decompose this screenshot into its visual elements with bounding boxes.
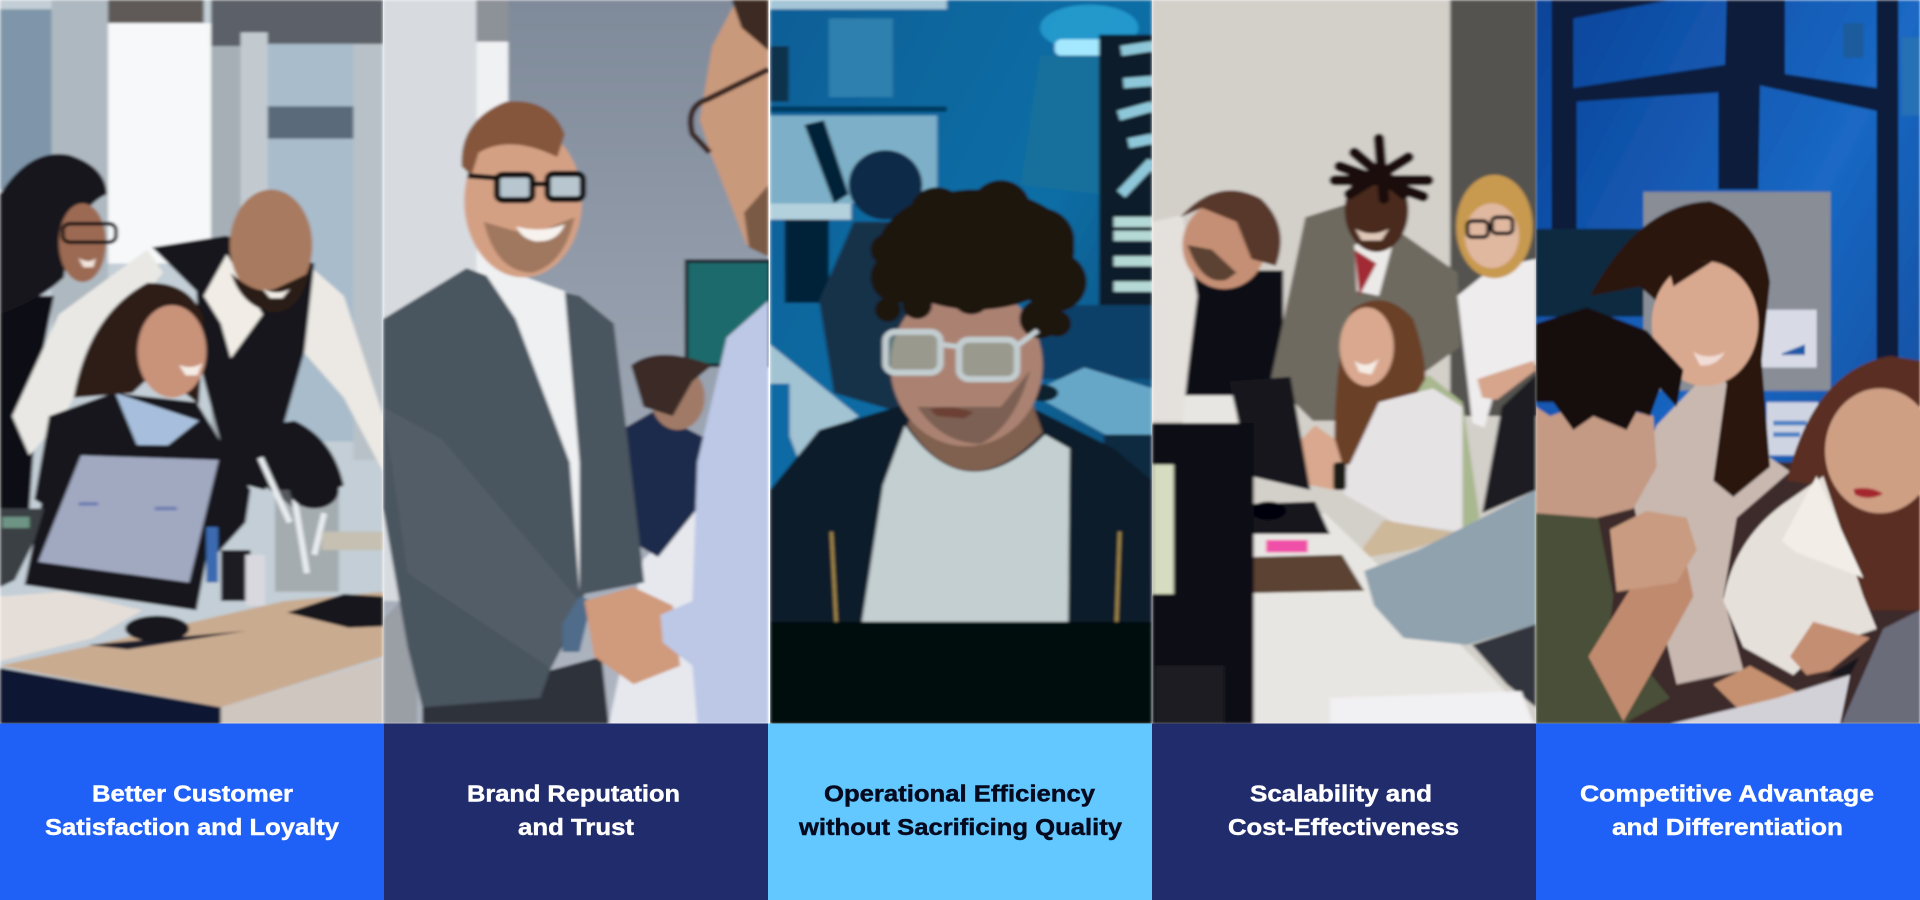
woman standing left bbox=[0, 154, 116, 509]
partner in blue shirt bbox=[661, 0, 769, 724]
caption text: Brand Reputation bbox=[467, 780, 680, 806]
colleague sleeve bbox=[1364, 490, 1536, 645]
caption text: Better Customer bbox=[92, 780, 293, 806]
background colleague bbox=[621, 355, 712, 557]
caption panel: better customer satisfaction bbox=[0, 724, 384, 900]
caption text: and Differentiation bbox=[1612, 814, 1843, 840]
woman seated right bbox=[1723, 356, 1920, 675]
man in front bbox=[1536, 307, 1697, 724]
desk bbox=[1251, 513, 1504, 724]
caption panel: brand reputation bbox=[384, 724, 768, 900]
woman seated bbox=[34, 283, 250, 555]
caption text: Cost-Effectiveness bbox=[1228, 814, 1459, 840]
man in grey blazer bbox=[383, 101, 680, 724]
desk bbox=[0, 592, 383, 707]
photo: three colleagues at a desk with laptop bbox=[0, 0, 383, 724]
caption text bbox=[467, 780, 680, 840]
woman seated with tablet bbox=[1283, 300, 1480, 559]
caption panel: scalability bbox=[1152, 724, 1536, 900]
laptop bbox=[1842, 610, 1920, 724]
caption text: without Sacrificing Quality bbox=[798, 814, 1122, 840]
caption panel: competitive advantage bbox=[1536, 724, 1920, 900]
programmer bbox=[770, 180, 1152, 636]
shadowed area behind the group bbox=[1596, 460, 1920, 724]
tablet bbox=[1229, 377, 1310, 490]
photo: three young colleagues at laptop at night bbox=[1536, 0, 1920, 724]
photo: young programmer with glasses at monitor bbox=[770, 0, 1152, 724]
caption text: Competitive Advantage bbox=[1580, 780, 1874, 806]
man on the left bbox=[1152, 191, 1281, 421]
laptop bbox=[25, 444, 228, 610]
man leaning over bbox=[12, 190, 383, 490]
caption panel: operational efficiency bbox=[768, 724, 1152, 900]
caption text: and Trust bbox=[518, 814, 634, 840]
caption text: Operational Efficiency bbox=[824, 780, 1095, 806]
blonde woman bbox=[1456, 175, 1536, 428]
monitor front bbox=[1152, 423, 1254, 724]
background silhouette bbox=[804, 120, 922, 416]
caption text bbox=[45, 780, 339, 840]
photo: team gathered around a tablet bbox=[1152, 0, 1538, 724]
woman standing in middle bbox=[1590, 201, 1790, 684]
caption text bbox=[798, 780, 1122, 840]
photo: businessman shaking hands bbox=[383, 0, 770, 724]
caption text bbox=[1580, 780, 1874, 840]
caption text: Scalability and bbox=[1250, 780, 1432, 806]
caption text bbox=[1228, 780, 1459, 840]
man in grey suit bbox=[1271, 139, 1460, 421]
caption text: Satisfaction and Loyalty bbox=[45, 814, 339, 840]
